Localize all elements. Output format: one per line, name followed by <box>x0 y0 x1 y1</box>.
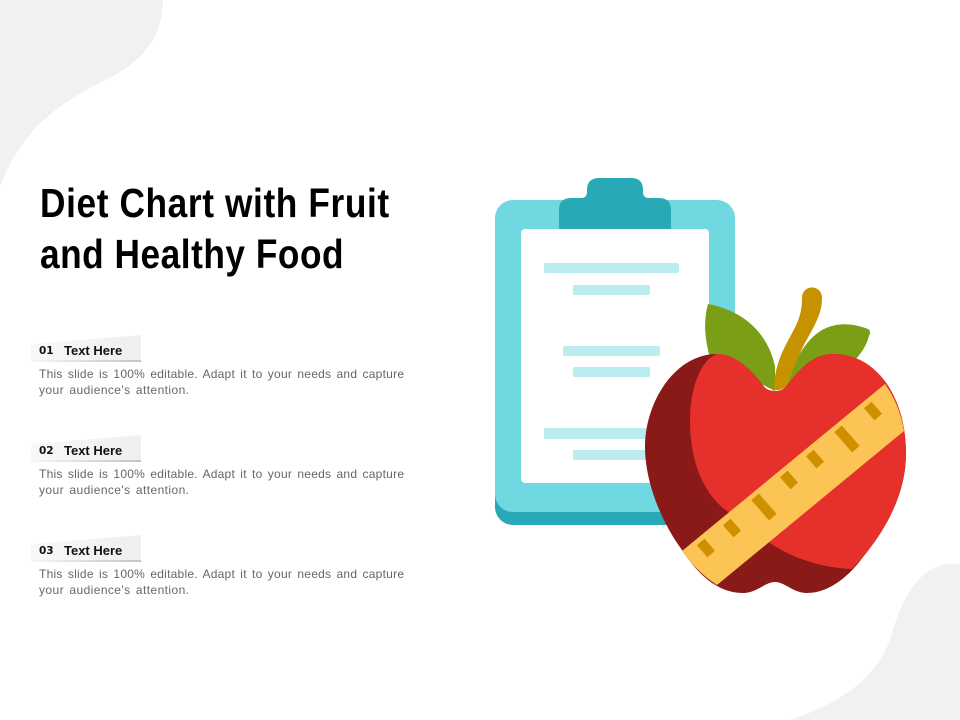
item 01 label tab <box>31 335 141 362</box>
icon: clipboard <box>495 178 735 525</box>
apple dark body <box>645 354 906 593</box>
paper text lines <box>544 263 679 460</box>
item 01 label tab: Text Here <box>64 343 122 358</box>
item 02 description: This slide is 100% editable. Adapt it to your needs and capture <box>39 467 404 481</box>
title: and Healthy Food <box>40 232 344 278</box>
item 03 label tab: 03 <box>39 545 54 557</box>
item 02 label tab <box>31 435 141 462</box>
clipboard clip <box>559 178 671 229</box>
item 02 description: your audience's attention. <box>39 483 189 497</box>
left leaf <box>705 304 775 391</box>
right leaf <box>786 324 870 388</box>
item 03 label tab <box>31 535 141 562</box>
item 02 description <box>39 467 404 497</box>
item 02 label tab: 02 <box>39 445 54 457</box>
stem <box>774 288 822 390</box>
title: Diet Chart with Fruit <box>40 181 389 227</box>
item 03 label tab: Text Here <box>64 543 122 558</box>
item 01 description <box>39 367 404 397</box>
background blob: top left <box>0 0 163 187</box>
item 03 description <box>39 567 404 597</box>
item 02 <box>31 435 404 497</box>
item 03 description: This slide is 100% editable. Adapt it to your needs and capture <box>39 567 404 581</box>
apple bright face <box>690 354 906 569</box>
clipboard board <box>495 200 735 512</box>
title <box>40 181 389 278</box>
item 01 description: your audience's attention. <box>39 383 189 397</box>
item 01 description: This slide is 100% editable. Adapt it to your needs and capture <box>39 367 404 381</box>
item 03 description: your audience's attention. <box>39 583 189 597</box>
clipboard base shadow <box>495 300 735 525</box>
icon: apple with measuring tape <box>645 288 906 593</box>
tape tick marks <box>697 402 882 557</box>
item 03 <box>31 535 404 597</box>
measuring tape <box>682 384 904 585</box>
item 01 label tab: 01 <box>39 345 54 357</box>
item 01 <box>31 335 404 397</box>
clipboard paper <box>521 229 709 483</box>
background blob: bottom right <box>790 564 960 720</box>
item 02 label tab: Text Here <box>64 443 122 458</box>
